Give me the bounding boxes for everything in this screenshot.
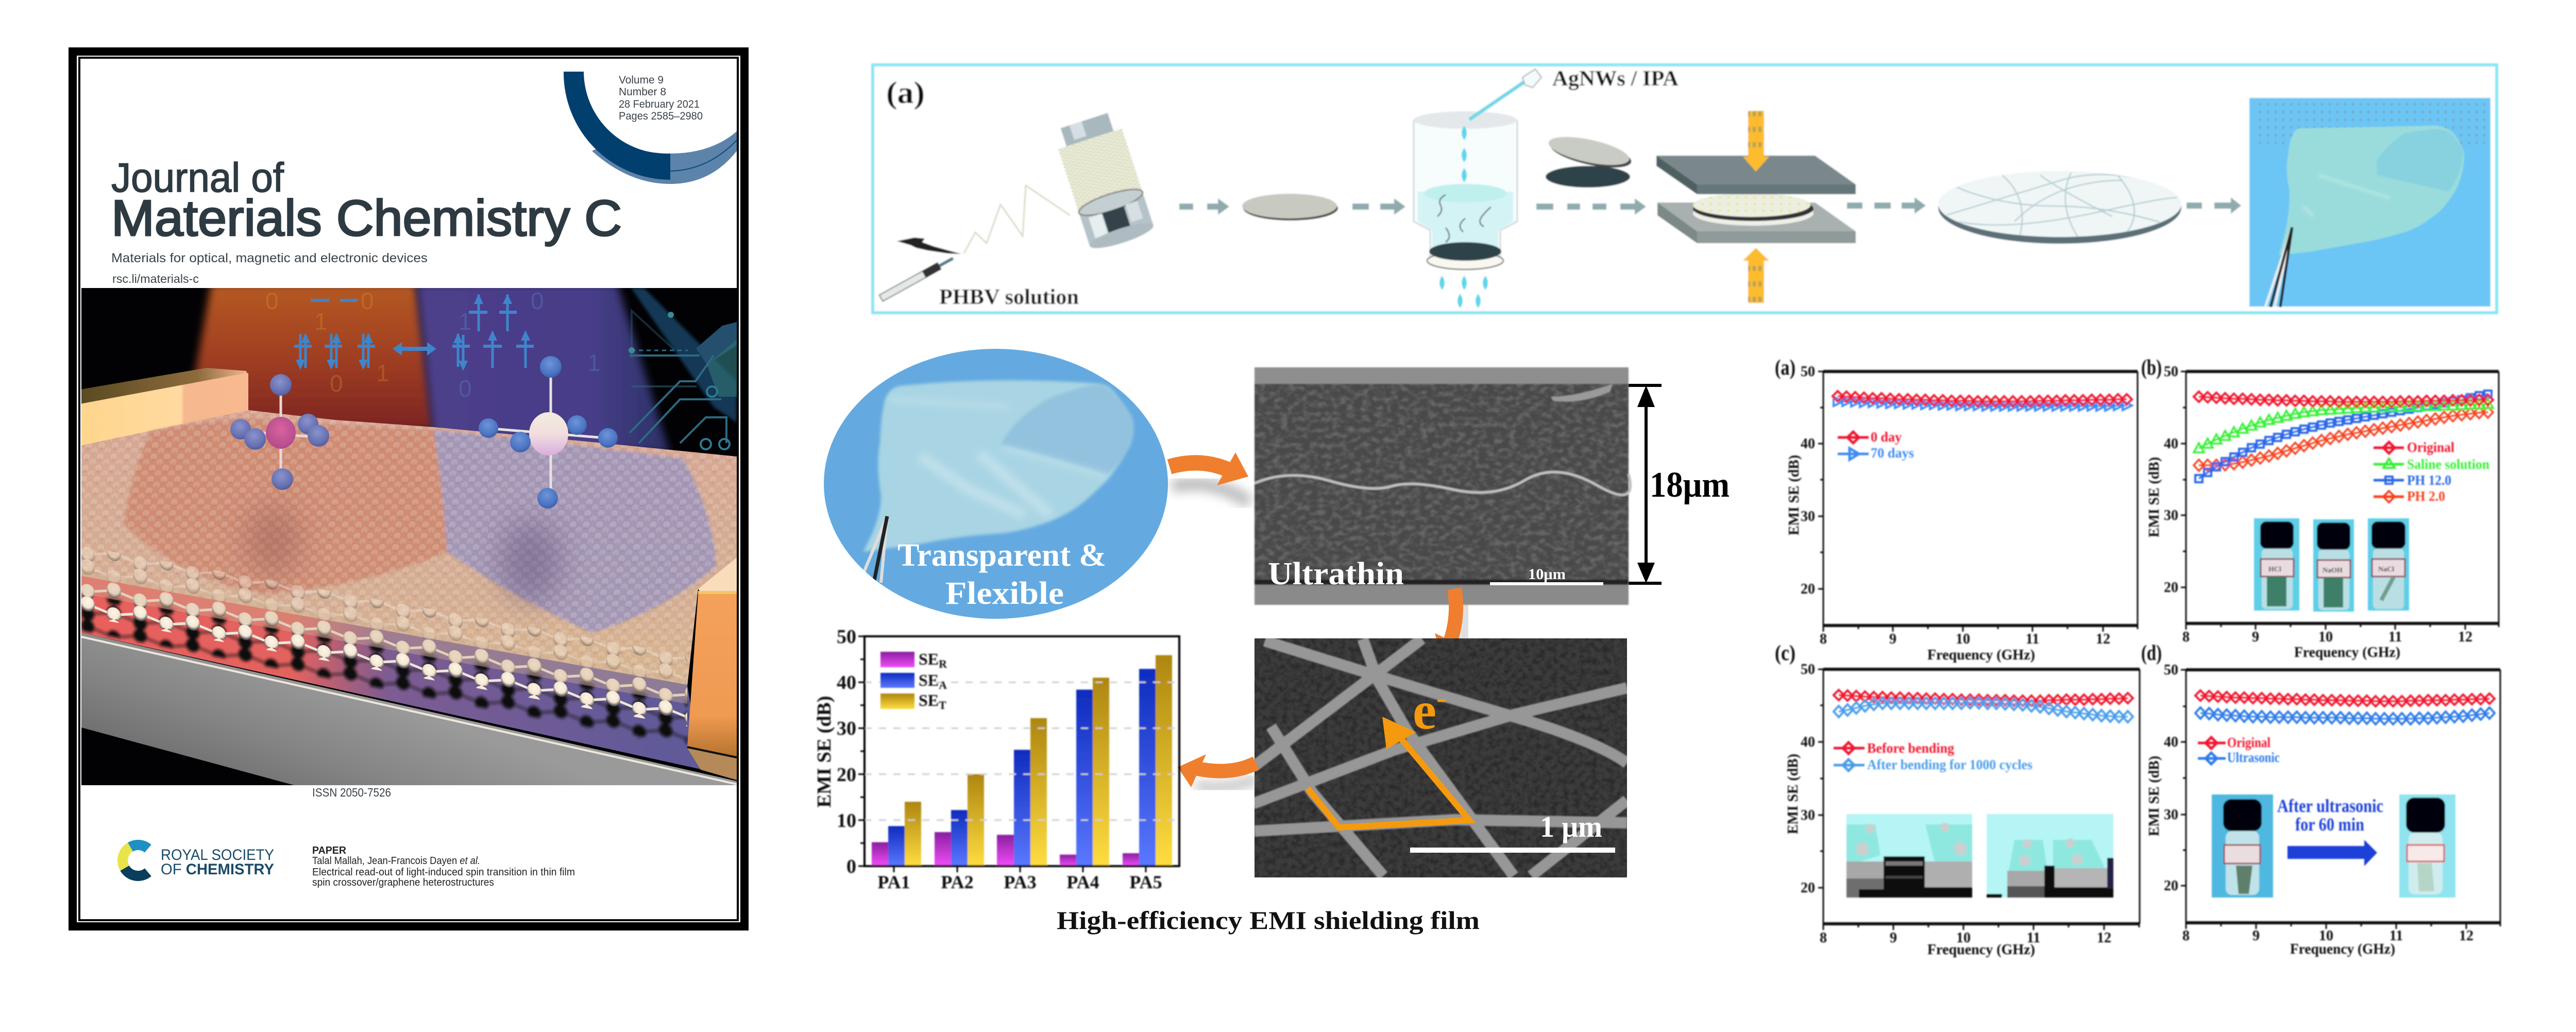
axis labels: EMI SE (dB) bbox=[2146, 756, 2162, 836]
icon: hot press bbox=[1656, 156, 1856, 243]
icon: fibre membrane disc bbox=[1242, 194, 1338, 221]
axis labels: 8 bbox=[2182, 928, 2190, 944]
scale bar: 1 micrometre bbox=[1410, 810, 1615, 853]
spin state arrows bbox=[294, 295, 534, 368]
film caption bbox=[897, 538, 1106, 611]
x axis tick labels: PA4 bbox=[1066, 872, 1099, 892]
journal url: rsc.li/materials-c bbox=[112, 272, 199, 285]
bars: PA4 bbox=[1060, 678, 1109, 866]
arrowhead bbox=[2231, 197, 2241, 214]
bars: PA1 bbox=[872, 802, 921, 866]
electron path bbox=[1308, 717, 1469, 827]
axis labels: 11 bbox=[2027, 930, 2040, 946]
photo: flexible film bbox=[2249, 98, 2490, 307]
graphene lattice bbox=[81, 578, 687, 726]
logo: Royal Society of Chemistry: OF CHEMISTRY bbox=[161, 861, 274, 878]
issue details: Volume 9 bbox=[619, 74, 664, 86]
bars: PA2 bbox=[935, 774, 984, 866]
label: electron: e bbox=[1413, 681, 1436, 740]
photo: transparent and flexible film bbox=[824, 349, 1168, 619]
red light beam bbox=[185, 283, 434, 430]
faint binary digits in beams: 0 bbox=[361, 287, 374, 314]
series: after bending for 1000 cycles bbox=[1839, 703, 2128, 717]
axis labels: 30 bbox=[2164, 807, 2178, 823]
series: Original bbox=[2199, 397, 2488, 402]
photo: vial NaOH bbox=[2313, 519, 2354, 612]
axis labels: 50 bbox=[2164, 662, 2178, 678]
icon: blue arc masthead bbox=[564, 72, 737, 184]
legend: PH 12.0 bbox=[2407, 472, 2451, 488]
arrow: step 2 bbox=[1352, 204, 1397, 210]
issue details: 28 February 2021 bbox=[619, 98, 700, 110]
caption: after ultrasonic bbox=[2277, 796, 2383, 835]
axis labels: 8 bbox=[1820, 631, 1827, 647]
legend bbox=[2198, 735, 2280, 765]
arrowhead bbox=[1635, 198, 1646, 215]
axis labels: 20 bbox=[2164, 878, 2178, 894]
legend bbox=[2374, 439, 2489, 504]
photo: SEM silver nanowires bbox=[1253, 638, 1627, 877]
axis labels: 12 bbox=[2459, 928, 2473, 944]
axis labels: 30 bbox=[1801, 509, 1815, 525]
spun fibre bbox=[964, 185, 1070, 253]
cover artwork bbox=[80, 283, 737, 785]
plot frame bbox=[1818, 371, 2138, 632]
legend: R bbox=[939, 657, 947, 670]
legend: T bbox=[939, 699, 946, 712]
faint binary digits in beams: 0 bbox=[265, 287, 279, 314]
axis labels: 10 bbox=[1956, 930, 1971, 946]
graphene fade bbox=[81, 569, 687, 704]
icon: stacked discs bbox=[1546, 131, 1634, 188]
series: 70 days bbox=[1838, 401, 2127, 406]
label: AgNWs / IPA: AgNWs / IPA bbox=[1552, 67, 1679, 91]
legend: Original bbox=[2407, 439, 2454, 455]
legend: 0 day bbox=[1871, 429, 1902, 445]
icon: pipette bbox=[1469, 69, 1541, 120]
chart: (b) chemical stability bbox=[2141, 356, 2499, 661]
icon: syringe bbox=[879, 255, 955, 302]
axis labels: 12 bbox=[2097, 930, 2111, 946]
title: Journal of Materials Chemistry C: Materials Chemistry C bbox=[111, 190, 622, 246]
axis labels: 8 bbox=[1820, 930, 1827, 946]
icon: electrospinning collector drum bbox=[1052, 110, 1156, 253]
photo: vial after ultrasonic bbox=[2399, 794, 2455, 898]
panel: journal cover bbox=[69, 47, 749, 931]
y axis tick labels: 20 bbox=[837, 764, 856, 786]
arrow: step 5 bbox=[2187, 202, 2235, 209]
axis labels: 50 bbox=[1801, 364, 1815, 380]
spin arrowheads bbox=[296, 294, 530, 371]
axis labels: 20 bbox=[1801, 880, 1815, 896]
label: PHBV solution: PHBV solution bbox=[939, 285, 1079, 309]
film caption: Flexible bbox=[945, 576, 1064, 611]
arrowhead bbox=[1914, 197, 1926, 214]
faint binary digits in beams bbox=[265, 287, 601, 402]
faint binary digits in beams: 1 bbox=[459, 308, 472, 335]
faint binary digits in beams: 0 bbox=[459, 375, 472, 402]
axis labels: 12 bbox=[2458, 629, 2472, 645]
icon: high-voltage bolt bbox=[897, 238, 961, 254]
axis labels bbox=[1785, 662, 2111, 958]
ISSN: ISSN 2050-7526 bbox=[312, 786, 391, 799]
icon: silver nanowire network disc bbox=[1938, 171, 2181, 244]
arrow: top press force bbox=[1743, 111, 1769, 172]
photo: vial HCl: HCl bbox=[2268, 566, 2281, 573]
axis labels bbox=[2146, 662, 2473, 957]
bar chart: EMI SE of PA1 to PA5 bbox=[814, 626, 1179, 892]
caption: after ultrasonic: After ultrasonic bbox=[2277, 796, 2383, 816]
faint binary digits in beams: 1 bbox=[314, 308, 328, 335]
photo: flat sample in bending rig bbox=[1846, 814, 1972, 898]
label: electron: - bbox=[1436, 681, 1447, 715]
series: PH 12.0 bbox=[2199, 394, 2488, 479]
y axis tick labels: 0 bbox=[846, 856, 856, 877]
arrow: step 3 bbox=[1536, 204, 1638, 210]
paper credit bbox=[312, 845, 575, 888]
arrowhead bbox=[1218, 198, 1229, 215]
photo: vial NaOH: NaOH bbox=[2323, 567, 2343, 574]
substrate surface bbox=[81, 576, 701, 769]
bars: PA3 bbox=[997, 718, 1047, 866]
logo: Royal Society of Chemistry bbox=[123, 845, 274, 878]
axis labels: Frequency (GHz) bbox=[2294, 645, 2400, 661]
axis labels: Frequency (GHz) bbox=[2290, 941, 2395, 957]
scale bar: 10 micrometres: 10μm bbox=[1528, 566, 1566, 583]
axis labels: EMI SE (dB) bbox=[1786, 455, 1802, 535]
label: Ultrathin: Ultrathin bbox=[1268, 556, 1404, 591]
graphene shadow lattice bbox=[81, 593, 687, 747]
blue light beam bbox=[416, 283, 670, 453]
axis labels: EMI SE (dB) bbox=[1785, 754, 1801, 834]
paper credit: Talal Mallah, Jean-Francois Dayen et al. bbox=[312, 855, 480, 867]
x axis tick labels: PA2 bbox=[941, 872, 974, 892]
paper credit: spin crossover/graphene heterostructures bbox=[312, 877, 494, 888]
arrow: film to SEM cross-section bbox=[1170, 452, 1249, 502]
x axis tick labels: PA5 bbox=[1129, 872, 1162, 892]
title: Journal of Materials Chemistry C bbox=[111, 155, 622, 246]
legend bbox=[1834, 740, 2032, 772]
title: Journal of Materials Chemistry C: Journal of bbox=[111, 155, 284, 200]
scale bar: 1 micrometre: 1 μm bbox=[1540, 810, 1602, 843]
plot frame bbox=[2181, 371, 2499, 630]
plot frame bbox=[2181, 670, 2500, 929]
issue details: Pages 2585–2980 bbox=[619, 110, 703, 122]
photo: bent sample in bending rig bbox=[1987, 814, 2113, 898]
series: ultrasonic bbox=[2200, 713, 2489, 719]
axis labels: 40 bbox=[1801, 436, 1815, 452]
legend: SE bbox=[919, 691, 939, 709]
legend: Saline solution bbox=[2407, 456, 2489, 472]
photo: vial HCl bbox=[2254, 518, 2299, 611]
series: PH 2.0 bbox=[2199, 412, 2488, 465]
axis labels: 11 bbox=[2389, 928, 2403, 944]
photo: SEM cross-section bbox=[1255, 367, 1631, 605]
caption: High-efficiency EMI shielding film: High-efficiency EMI shielding film bbox=[1057, 906, 1480, 935]
logo: Royal Society of Chemistry: ROYAL SOCIETY bbox=[161, 847, 274, 864]
panel letter: (c) bbox=[1775, 641, 1795, 665]
faint binary digits in beams: 1 bbox=[376, 360, 389, 386]
y axis tick labels: 40 bbox=[837, 672, 856, 693]
axis labels: 11 bbox=[2388, 629, 2402, 645]
molecule: low spin bbox=[230, 374, 329, 490]
arrow: step 4 bbox=[1847, 202, 1919, 209]
photo: vial NaCl: NaCl bbox=[2378, 566, 2394, 573]
axis labels: 8 bbox=[2182, 629, 2190, 645]
chart: (a) ageing stability bbox=[1775, 356, 2138, 663]
series: original bbox=[2200, 696, 2489, 701]
axis labels bbox=[2146, 364, 2472, 661]
bars: PA5 bbox=[1123, 655, 1172, 866]
arrow: cross-section to nanowires bbox=[1435, 589, 1469, 661]
legend: PH 2.0 bbox=[2407, 488, 2445, 504]
arrow: ultrasonic treatment bbox=[2287, 840, 2377, 866]
axis labels: 40 bbox=[1801, 734, 1815, 750]
chart: (d) ultrasonic stability bbox=[2141, 641, 2500, 957]
panel letter: (a) bbox=[1775, 356, 1795, 380]
legend bbox=[880, 650, 947, 712]
glow edge and circuit traces bbox=[629, 288, 737, 449]
cover frame bbox=[69, 47, 749, 931]
molecule: high spin bbox=[479, 356, 618, 509]
y axis tick labels: 30 bbox=[837, 718, 856, 739]
axis labels: 30 bbox=[1801, 807, 1815, 823]
axis labels: 10 bbox=[2318, 629, 2333, 645]
photo: vial NaCl bbox=[2368, 518, 2409, 611]
legend: A bbox=[939, 679, 947, 691]
x axis tick labels: PA3 bbox=[1004, 872, 1037, 892]
axis labels: 20 bbox=[1801, 581, 1815, 597]
left electrode bbox=[80, 368, 248, 448]
series: before bending bbox=[1839, 695, 2128, 701]
axis labels: 10 bbox=[2319, 928, 2333, 944]
axis labels: 9 bbox=[2252, 928, 2260, 944]
paper credit: PAPER bbox=[312, 845, 347, 856]
legend: SE bbox=[919, 650, 939, 668]
axis labels: 12 bbox=[2096, 631, 2110, 647]
panel frame bbox=[873, 65, 2497, 313]
panel letter: (a) bbox=[886, 76, 925, 110]
legend: 70 days bbox=[1871, 445, 1914, 461]
axis labels: 40 bbox=[2164, 734, 2178, 750]
thickness dimension: 18 micrometres: 18μm bbox=[1650, 465, 1730, 505]
axis labels: 9 bbox=[1889, 631, 1896, 647]
legend: Original bbox=[2227, 735, 2270, 750]
axis labels bbox=[1786, 364, 2110, 663]
axis labels: 40 bbox=[2164, 436, 2178, 452]
base slab bbox=[81, 633, 737, 785]
issue details: Number 8 bbox=[619, 86, 666, 98]
issue details bbox=[619, 74, 703, 122]
legend: Ultrasonic bbox=[2227, 750, 2280, 765]
thickness dimension: 18 micrometres bbox=[1629, 385, 1730, 583]
faint binary digits in beams: 0 bbox=[330, 370, 343, 397]
y axis tick labels: 50 bbox=[837, 626, 856, 648]
axis labels: 9 bbox=[1890, 930, 1897, 946]
arrow: step 1 bbox=[1179, 204, 1222, 210]
legend: Before bending bbox=[1867, 740, 1954, 756]
arrow: bottom press force bbox=[1743, 248, 1769, 303]
series: Saline solution bbox=[2199, 404, 2488, 448]
x axis tick labels bbox=[877, 872, 1162, 892]
photo: vial before ultrasonic bbox=[2212, 794, 2273, 898]
axis labels: EMI SE (dB) bbox=[2146, 457, 2162, 537]
y axis title: EMI SE (dB) bbox=[814, 696, 835, 808]
panel letter: (b) bbox=[2141, 356, 2162, 380]
icon: filtration funnel bbox=[1414, 111, 1517, 269]
caption: after ultrasonic: for 60 min bbox=[2295, 814, 2364, 835]
right electrode bbox=[687, 557, 737, 780]
axis labels: 11 bbox=[2026, 631, 2039, 647]
chart: (c) bending stability bbox=[1775, 641, 2140, 958]
faint binary digits in beams: 1 bbox=[587, 349, 601, 376]
faint binary digits in beams: 0 bbox=[531, 287, 544, 314]
plot frame bbox=[1818, 669, 2140, 930]
paper credit: Electrical read-out of light-induced spin transition in thin film bbox=[312, 867, 575, 878]
axis labels: 10 bbox=[1956, 631, 1970, 647]
panel: film properties summary bbox=[814, 349, 1730, 935]
film caption: Transparent & bbox=[897, 538, 1106, 573]
subtitle: Materials for optical, magnetic and electronic devices bbox=[111, 251, 428, 265]
x axis tick labels: PA1 bbox=[877, 872, 910, 892]
axis labels: 30 bbox=[2164, 507, 2178, 523]
y axis tick labels: 10 bbox=[837, 810, 856, 832]
arrowhead bbox=[1394, 198, 1405, 215]
spin crossover film bbox=[80, 410, 737, 686]
axis labels: 9 bbox=[2252, 629, 2259, 645]
legend bbox=[1838, 429, 1914, 461]
axis labels: 50 bbox=[2164, 364, 2178, 380]
axis labels: Frequency (GHz) bbox=[1927, 647, 2035, 663]
legend: After bending for 1000 cycles bbox=[1867, 757, 2032, 772]
back rows of graphene lattice bbox=[81, 546, 687, 690]
panel letter: (d) bbox=[2141, 641, 2162, 665]
axis labels: Frequency (GHz) bbox=[1927, 942, 2035, 958]
scale bar: 10 micrometres bbox=[1490, 566, 1603, 585]
chart axes bbox=[858, 636, 1179, 872]
arrow: nanowires to bar chart bbox=[1178, 754, 1257, 787]
icon: droplets bbox=[1439, 126, 1488, 308]
legend: SE bbox=[919, 671, 939, 689]
panel: fabrication process bbox=[873, 65, 2497, 313]
y axis tick labels bbox=[837, 626, 856, 877]
axis labels: 20 bbox=[2164, 580, 2178, 596]
axis labels: 50 bbox=[1801, 662, 1815, 678]
series: 0 day bbox=[1838, 396, 2127, 401]
